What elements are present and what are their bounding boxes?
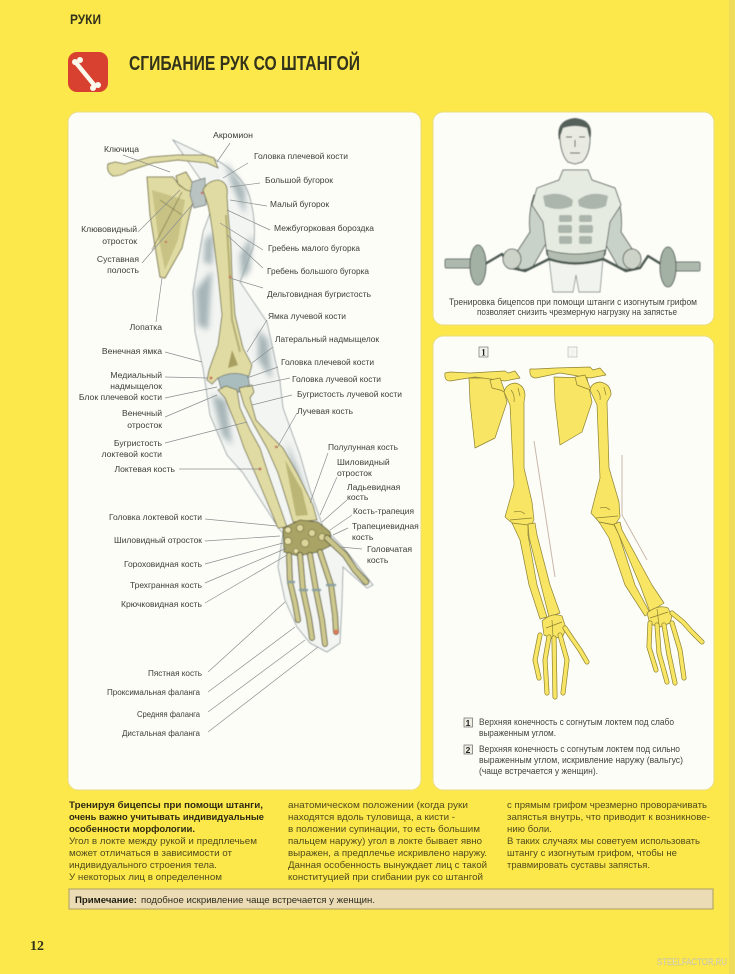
label: Шиловидный отросток: Шиловидный отросток: [114, 535, 202, 545]
radius: [239, 385, 317, 522]
text column 3: В таких случаях мы советуем использовать: [507, 836, 700, 846]
page number: 12: [30, 939, 44, 954]
label: Клювовидный отросток: отросток: [102, 236, 137, 246]
label: Ключица: Ключица: [104, 144, 139, 154]
text column 2: пальцем наружу) угол в локте бывает явно: [288, 836, 482, 846]
arm silhouette: [173, 140, 373, 652]
head: [560, 120, 590, 164]
label: Кость-трапеция: Кость-трапеция: [353, 506, 414, 516]
legend item 1: Верхняя конечность с согнутым локтем под слабо: [479, 717, 674, 727]
label: Головка плечевой кости: Головка плечевой кости: [254, 151, 348, 161]
legend item 2: Верхняя конечность с согнутым локтем под сильно: [479, 744, 680, 754]
text column 1: очень важно учитывать индивидуальные: [69, 812, 264, 822]
text column 3: [507, 800, 710, 870]
text column 2: Данная особенность вынуждает лиц с такой: [288, 860, 487, 870]
label: Трехгранная кость: Трехгранная кость: [130, 580, 202, 590]
label: Дистальная фаланга: Дистальная фаланга: [122, 728, 200, 738]
torso: [532, 170, 621, 255]
coracoid process: [176, 172, 194, 192]
label: Блок плечевой кости: Блок плечевой кости: [79, 392, 162, 402]
shoulder joint: [190, 178, 206, 208]
trochlea: [218, 373, 250, 392]
label: Клювовидный отросток: Клювовидный: [81, 224, 137, 234]
label: Бугристость локтевой кости: локтевой кости: [102, 449, 162, 459]
title: СГИБАНИЕ РУК СО ШТАНГОЙ: [129, 51, 360, 75]
label: Дельтовидная бугристость: Дельтовидная бугристость: [267, 289, 372, 299]
legend item 1: 1: [466, 718, 471, 728]
barbell plates: [470, 245, 486, 285]
label: Шиловидный отросток: Шиловидный: [337, 457, 390, 467]
text column 2: [288, 800, 487, 882]
leader lines: [123, 143, 362, 732]
label: Локтевая кость: Локтевая кость: [114, 464, 176, 474]
label: Лучевая кость: Лучевая кость: [297, 406, 354, 416]
legend item 2: (чаще встречается у женщин).: [479, 766, 598, 776]
label: Лопатка: Лопатка: [130, 322, 162, 332]
text column 1: индивидуального строения тела.: [69, 860, 217, 870]
label: Гребень малого бугорка: Гребень малого бугорка: [268, 243, 360, 253]
legend item 1: [464, 717, 674, 738]
label: Головчатая кость: Головчатая: [367, 544, 412, 554]
label: Венечный отросток: Венечный: [122, 408, 162, 418]
label: Полулунная кость: Полулунная кость: [328, 442, 399, 452]
label: Крючковидная кость: Крючковидная кость: [121, 599, 203, 609]
barbell sleeves: [445, 259, 471, 268]
arm shading: [196, 160, 308, 500]
scapula: [147, 177, 193, 278]
text column 2: выражен, а предплечье искривлено наружу.: [288, 848, 487, 858]
illustration: athlete with curved barbell: [445, 118, 700, 292]
label: Акромион: Акромион: [213, 130, 253, 140]
label: Шиловидный отросток: отросток: [337, 468, 372, 478]
text column 2: в положении супинации, то есть большим: [288, 824, 480, 834]
pants: [549, 258, 603, 292]
barbell bar: [485, 254, 661, 271]
label: Венечный отросток: отросток: [127, 420, 162, 430]
label: Головчатая кость: кость: [367, 555, 389, 565]
hands: [503, 249, 521, 269]
label: Гороховидная кость: Гороховидная кость: [124, 559, 203, 569]
label: Головка плечевой кости: Головка плечевой кости: [281, 357, 374, 367]
note box: Примечание:: [75, 895, 137, 906]
caption: позволяет снизить чрезмерную нагрузку на запястье: [477, 307, 677, 317]
ulna: [218, 386, 287, 528]
text column 3: нию боли.: [507, 824, 552, 834]
fingers: [288, 538, 366, 644]
caption: [449, 297, 697, 317]
number marker 1: [479, 347, 488, 358]
text column 2: находятся вдоль туловища, а кисти -: [288, 812, 455, 822]
clavicle: [108, 155, 218, 176]
arms: [513, 195, 552, 270]
number marker 1: 1: [481, 348, 486, 358]
illustration: arm skeleton: [108, 140, 373, 652]
label: Суставная полость: полость: [107, 265, 140, 275]
label: Латеральный надмыщелок: Латеральный надмыщелок: [275, 334, 379, 344]
number marker 2: 2: [570, 348, 574, 358]
red bone markers: [165, 192, 277, 470]
watermark: STEELFACTOR.RU: [657, 957, 727, 967]
icon: bone: [68, 52, 108, 92]
belt: [547, 250, 605, 264]
section heading: РУКИ: [70, 11, 101, 27]
legend item 2: [464, 744, 683, 776]
text column 3: травмировать суставы запястья.: [507, 860, 650, 870]
text column 1: Угол в локте между рукой и предплечьем: [69, 836, 257, 846]
label: Ладьевидная кость: кость: [347, 492, 369, 502]
panel: barbell curl: [433, 112, 714, 325]
legend item 2: выраженным углом, искривление наружу (вальгус): [479, 755, 683, 765]
label: Межбугорковая бороздка: Межбугорковая бороздка: [274, 223, 374, 233]
caption: Тренировка бицепсов при помощи штанги с изогнутым грифом: [449, 297, 697, 307]
label: Головка лучевой кости: Головка лучевой кости: [292, 374, 381, 384]
text column 1: может отличаться в зависимости от: [69, 848, 233, 858]
note box: [69, 889, 713, 909]
number marker 2: [568, 347, 577, 358]
label: Бугристость лучевой кости: Бугристость лучевой кости: [297, 389, 402, 399]
label: Проксимальная фаланга: Проксимальная фаланга: [107, 687, 200, 697]
label: Малый бугорок: Малый бугорок: [270, 199, 329, 209]
label: Медиальный надмыщелок: Медиальный: [110, 370, 162, 380]
label: Бугристость локтевой кости: Бугристость: [114, 438, 162, 448]
label: Ямка лучевой кости: Ямка лучевой кости: [268, 311, 346, 321]
facial features: [566, 137, 585, 153]
label: Пястная кость: Пястная кость: [148, 668, 202, 678]
label: Гребень большого бугорка: Гребень большого бугорка: [267, 266, 369, 276]
text column 1: У некоторых лиц в определенном: [69, 872, 222, 882]
label: Ладьевидная кость: Ладьевидная: [347, 482, 400, 492]
label: Венечная ямка: Венечная ямка: [102, 346, 162, 356]
label: Большой бугорок: Большой бугорок: [265, 175, 333, 185]
legend item 2: 2: [466, 745, 471, 755]
carpal bones: [283, 520, 332, 556]
label: Головка локтевой кости: Головка локтевой кости: [109, 512, 202, 522]
humerus: [203, 180, 252, 384]
legend item 1: выраженным углом.: [479, 728, 556, 738]
text column 1: особенности морфологии.: [69, 824, 195, 834]
text column 3: запястья внутрь, что приводит к возникнове-: [507, 812, 710, 822]
hair: [558, 118, 591, 140]
text column 2: анатомическом положении (когда руки: [288, 800, 468, 810]
text column 3: штангу с изогнутым грифом, чтобы не: [507, 848, 677, 858]
illustration: arm 1 skeleton: [445, 371, 587, 697]
illustration: arm 2 skeleton: [530, 367, 702, 683]
text column 2: конституцией при сгибании рук со штангой: [288, 872, 483, 882]
label: Трапециевидная кость: Трапециевидная: [352, 521, 419, 531]
text column 1: Тренируя бицепсы при помощи штанги,: [69, 800, 263, 810]
panel: arm angle comparison: [433, 336, 714, 790]
text column 3: с прямым грифом чрезмерно проворачивать: [507, 800, 707, 810]
label: Средняя фаланга: Средняя фаланга: [137, 709, 200, 719]
label: Трапециевидная кость: кость: [352, 532, 374, 542]
panel: arm anatomy: [68, 112, 421, 790]
torso shading: [543, 194, 608, 244]
label: Суставная полость: Суставная: [97, 254, 139, 264]
text column 1: [69, 800, 264, 882]
note box: подобное искривление чаще встречается у женщин.: [141, 895, 375, 906]
label: Медиальный надмыщелок: надмыщелок: [110, 381, 162, 391]
